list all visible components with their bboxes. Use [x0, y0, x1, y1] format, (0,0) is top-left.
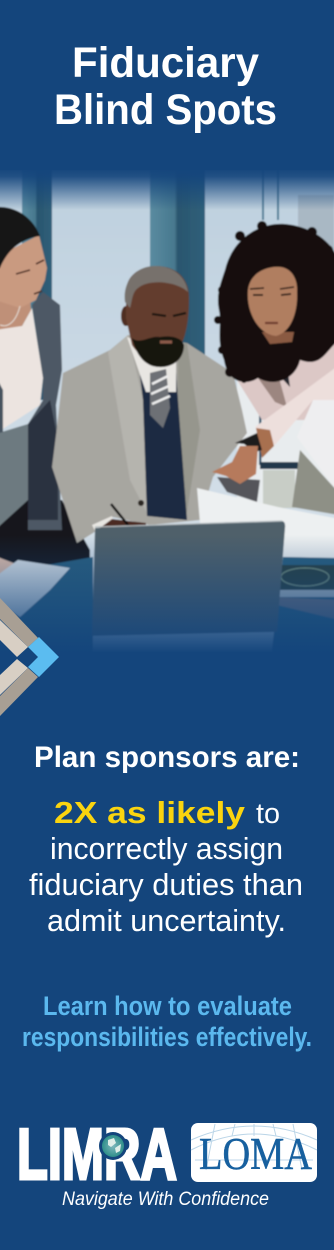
office wall and columns — [0, 150, 334, 660]
title — [54, 39, 277, 134]
man: jacket — [52, 335, 260, 543]
statistic text — [29, 795, 303, 938]
laptop — [92, 521, 285, 636]
call to action: Learn how to evaluate — [43, 991, 292, 1021]
table — [0, 557, 334, 665]
photo: three colleagues around a laptop — [0, 140, 334, 682]
woman on left — [0, 207, 90, 585]
statistic text: to — [256, 798, 280, 830]
bottom fade — [0, 535, 334, 653]
papers on table — [197, 488, 334, 558]
statistic text: incorrectly assign — [50, 831, 283, 866]
statistic text: fiduciary duties than — [29, 867, 303, 902]
title: Blind Spots — [54, 86, 277, 134]
logo: LOMA: LOMA — [199, 1129, 312, 1179]
tagline: Navigate With Confidence — [62, 1189, 269, 1210]
statistic text: 2X as likely — [54, 795, 246, 830]
woman on right: jacket — [212, 310, 334, 515]
call to action — [22, 991, 312, 1052]
woman on right: hair and face — [214, 221, 334, 383]
decorative chevron diamond — [0, 598, 59, 716]
subheading: Plan sponsors are: — [34, 741, 300, 774]
paper at left — [0, 560, 70, 617]
statistic text: admit uncertainty. — [47, 903, 286, 938]
man: head and beard — [121, 266, 189, 367]
title: Fiduciary — [72, 39, 259, 87]
icon: globe — [99, 1132, 127, 1160]
top fade — [0, 140, 334, 170]
logo: LIMRA: LIMRA — [17, 1115, 177, 1195]
